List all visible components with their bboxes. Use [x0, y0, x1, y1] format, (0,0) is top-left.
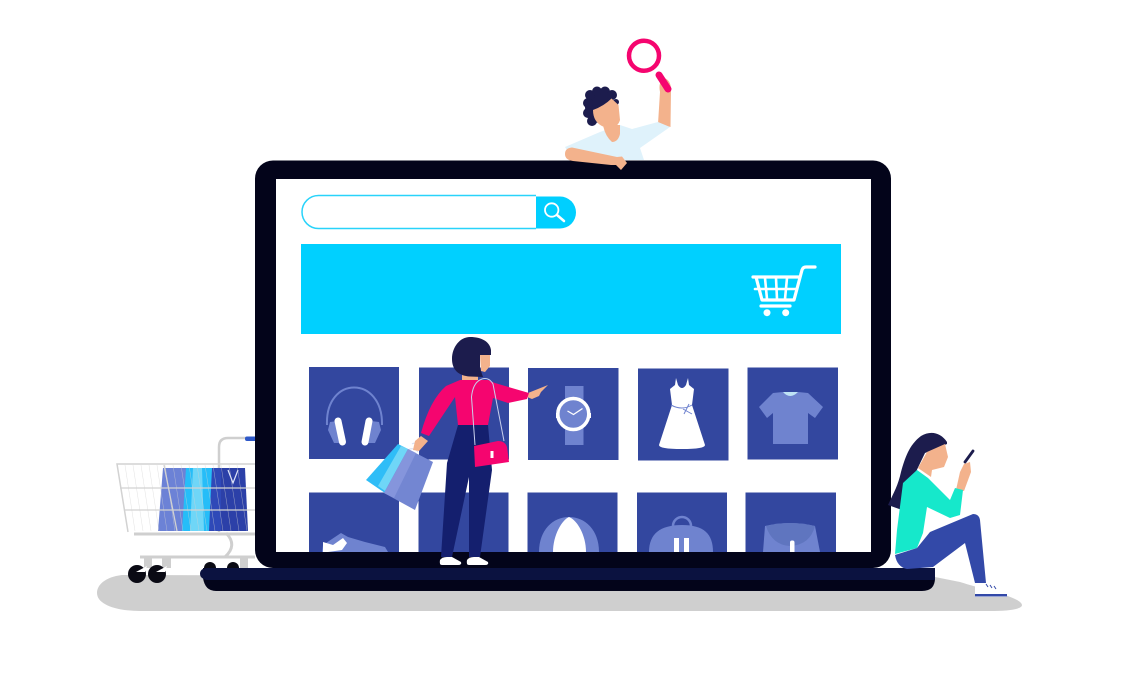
- pointing hand: [527, 385, 548, 399]
- neck: [603, 125, 620, 142]
- curly hair: [583, 86, 619, 126]
- tile: cap: [528, 492, 618, 552]
- phone: [965, 451, 973, 462]
- person with magnifying glass: [565, 41, 671, 170]
- bag strap: [472, 379, 504, 445]
- standing woman: [366, 337, 548, 565]
- magnifying glass handle: [659, 75, 668, 89]
- laptop bottom bezel: [276, 552, 871, 568]
- tile: shorts: [746, 492, 836, 554]
- face and neck: [918, 444, 948, 477]
- hand on bag: [413, 436, 428, 451]
- icon: cart: [753, 267, 815, 316]
- search button: [536, 196, 576, 228]
- laptop lid: [255, 160, 891, 568]
- trousers: [895, 514, 986, 583]
- search bar: [302, 196, 576, 228]
- cart frame: [134, 438, 255, 568]
- cart basket wire: [117, 464, 255, 532]
- banner: [301, 244, 841, 334]
- tile: hidden product: [419, 368, 509, 460]
- shopping bag: [366, 443, 433, 510]
- magnifying glass ring: [629, 41, 659, 71]
- shirt: [565, 122, 670, 160]
- tile: headphones: [309, 367, 399, 459]
- resting arm: [565, 148, 627, 170]
- forearm: [956, 462, 971, 491]
- laptop: [200, 160, 935, 591]
- cart handle grip: [245, 436, 257, 441]
- raised arm: [658, 78, 671, 127]
- face: [593, 98, 620, 128]
- shopping cart: [117, 436, 257, 583]
- face: [480, 355, 490, 372]
- tile: handbag: [637, 492, 727, 553]
- ground shadow: [97, 575, 1022, 611]
- laptop base: [200, 568, 935, 591]
- tile: hidden product 2: [418, 492, 508, 552]
- sweater: [421, 380, 529, 436]
- seated woman: [888, 433, 1007, 597]
- sweater: [895, 470, 963, 554]
- tile: watch: [528, 368, 618, 460]
- search input: [302, 196, 536, 228]
- bag clasp: [490, 451, 494, 458]
- laptop screen: [276, 179, 871, 552]
- icon: magnifier: [545, 203, 564, 221]
- neck: [462, 372, 478, 382]
- bags in cart: [158, 468, 248, 531]
- product grid: [309, 367, 838, 554]
- crossbody bag: [474, 441, 509, 467]
- tile: shoe: [309, 492, 399, 552]
- tile: t-shirt: [748, 368, 838, 460]
- tile: dress: [638, 368, 728, 460]
- cart wheels: [128, 562, 239, 583]
- shoes: [440, 557, 488, 565]
- hair: [452, 337, 491, 377]
- shoe: [975, 584, 1007, 597]
- hair: [888, 433, 947, 510]
- trousers: [441, 425, 492, 557]
